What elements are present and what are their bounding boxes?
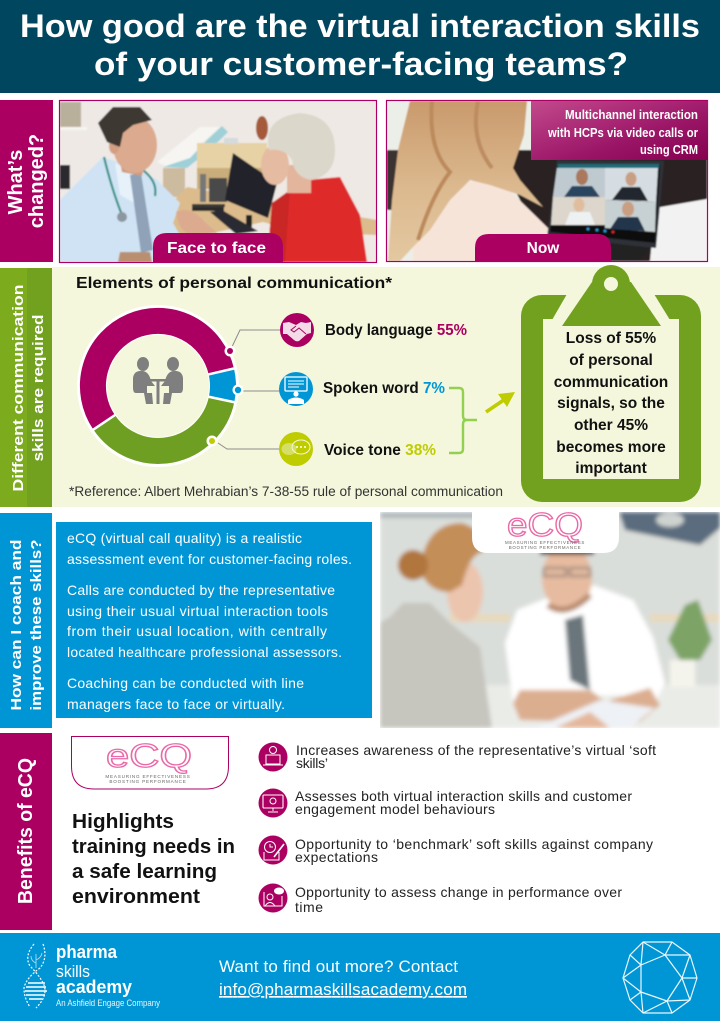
tab: now: Now — [527, 240, 560, 257]
benefit 3 — [258, 836, 653, 865]
contact text — [219, 957, 467, 999]
side label: communication skills: skills are required — [30, 314, 47, 462]
side label: what's changed: What’s — [5, 150, 27, 214]
panel: eCQ description: using their usual virtual interaction tools — [67, 603, 328, 619]
marker dots — [206, 346, 244, 446]
contact text: Want to find out more? Contact — [219, 957, 458, 976]
icon: geometric gem — [623, 942, 697, 1013]
benefit 1: Increases awareness of the representative’s virtual ‘soft — [296, 742, 656, 758]
benefit 3: Opportunity to ‘benchmark’ soft skills against company — [295, 836, 653, 852]
contact text: info@pharmaskillsacademy.com — [219, 980, 467, 999]
clipboard callout — [521, 265, 701, 502]
benefit 3: expectations — [295, 849, 378, 865]
side label: benefits of eCQ: Benefits of eCQ — [15, 758, 37, 904]
clipboard text: other 45% — [574, 417, 648, 434]
panel: eCQ description: assessment event for customer-facing roles. — [67, 551, 352, 567]
label: voice tone: Voice tone 38% — [324, 442, 436, 459]
logo wordmark: skills — [56, 962, 90, 981]
patient — [267, 177, 367, 262]
doctor — [60, 157, 180, 262]
icon: DNA helix — [24, 944, 47, 1008]
callout: multichannel interaction: with HCPs via video calls or — [547, 126, 698, 140]
clipboard text: of personal — [569, 352, 653, 369]
callout: multichannel interaction: using CRM — [640, 143, 698, 157]
tab: face to face — [153, 233, 283, 262]
icon: voice tone — [279, 432, 313, 466]
benefit 2: engagement model behaviours — [295, 801, 495, 817]
side label: how can I coach: How can I coach and — [8, 540, 25, 710]
side label: how can I coach — [0, 513, 52, 728]
bracket — [449, 388, 477, 453]
highlight statement: a safe learning — [72, 861, 217, 883]
leader lines — [218, 330, 281, 449]
benefit 4 — [258, 884, 622, 915]
side label: what's changed: changed? — [26, 134, 48, 228]
side label: how can I coach: improve these skills? — [28, 540, 45, 710]
logo tab: eCQ: BOOSTING PERFORMANCE — [509, 545, 581, 550]
donut chart — [77, 305, 239, 467]
clipboard text: important — [575, 460, 647, 477]
logo tab: eCQ: eCQ — [507, 506, 583, 543]
highlight statement: environment — [72, 886, 200, 908]
heading: elements of personal communication: Elements of personal communication* — [76, 275, 393, 292]
benefit 2: Assesses both virtual interaction skills and customer — [295, 788, 632, 804]
logo wordmark: pharma — [56, 942, 118, 962]
clipboard text — [554, 330, 668, 477]
benefit 4: Opportunity to assess change in performance over — [295, 884, 622, 900]
footer — [0, 933, 720, 1021]
benefit 4: time — [295, 899, 323, 915]
side label: communication skills — [0, 268, 52, 507]
highlight statement — [72, 811, 235, 908]
footnote: *Reference: Albert Mehrabian’s 7-38-55 rule of personal communication — [69, 484, 503, 499]
clipboard text: becomes more — [556, 439, 666, 456]
logo box: eCQ: BOOSTING PERFORMANCE — [109, 779, 187, 784]
logo tab: eCQ — [472, 506, 619, 553]
side label: benefits of eCQ — [0, 733, 52, 930]
title: of your customer-facing teams? — [94, 46, 628, 82]
icon: two people at table — [133, 357, 183, 404]
highlight statement: training needs in — [72, 836, 235, 858]
callout: multichannel interaction — [531, 101, 708, 160]
side label: communication skills: Different communication — [10, 284, 27, 492]
logo tab: eCQ: MEASURING EFFECTIVENESS — [505, 540, 585, 545]
callout: multichannel interaction: Multichannel interaction — [565, 108, 698, 122]
icon: person with speech bubble — [258, 884, 288, 912]
logo wordmark — [56, 942, 160, 1008]
panel: eCQ description: Calls are conducted by the representative — [67, 582, 335, 598]
photo: video call on laptop — [386, 100, 708, 262]
label: spoken word: Spoken word 7% — [323, 380, 445, 397]
clipboard text: communication — [554, 374, 668, 391]
panel: eCQ description: eCQ (virtual call quality) is a realistic — [67, 530, 302, 546]
panel: different communication skills — [0, 267, 720, 507]
photo: coaching conversation — [380, 512, 720, 728]
photo: doctor and patient, face to face — [60, 100, 377, 262]
panel: eCQ description: Coaching can be conducted with line — [67, 675, 304, 691]
icon: stopwatch and pencil — [258, 836, 288, 864]
icon: monitor — [258, 788, 288, 818]
arrow — [486, 392, 515, 412]
panel: eCQ description: managers face to face or virtually. — [67, 696, 285, 712]
panel: eCQ description: from their usual location, with centrally — [67, 623, 327, 639]
label: body language: Body language 55% — [325, 322, 467, 339]
benefit 1 — [258, 742, 656, 772]
logo wordmark: academy — [56, 977, 132, 997]
logo wordmark: An Ashfield Engage Company — [56, 998, 160, 1008]
side label: what's changed — [0, 100, 53, 262]
icon: person at laptop — [258, 742, 288, 772]
clipboard text: Loss of 55% — [566, 330, 656, 347]
logo box: eCQ — [72, 736, 228, 789]
clipboard text: signals, so the — [557, 395, 665, 412]
benefit 2 — [258, 788, 632, 818]
highlight statement: Highlights — [72, 811, 174, 833]
logo box: eCQ: eCQ — [106, 737, 192, 774]
title: How good are the virtual interaction skills — [20, 8, 700, 44]
tab: now — [475, 234, 611, 262]
logo box: eCQ: MEASURING EFFECTIVENESS — [105, 774, 191, 779]
title — [20, 8, 700, 82]
panel: eCQ description — [56, 522, 372, 718]
icon: spoken word — [279, 372, 313, 406]
tab: face to face: Face to face — [167, 240, 266, 257]
icon: handshake — [280, 313, 314, 347]
title banner — [0, 0, 720, 93]
panel: eCQ description: located healthcare professional assessors. — [67, 644, 342, 660]
benefit 1: skills’ — [296, 755, 328, 771]
